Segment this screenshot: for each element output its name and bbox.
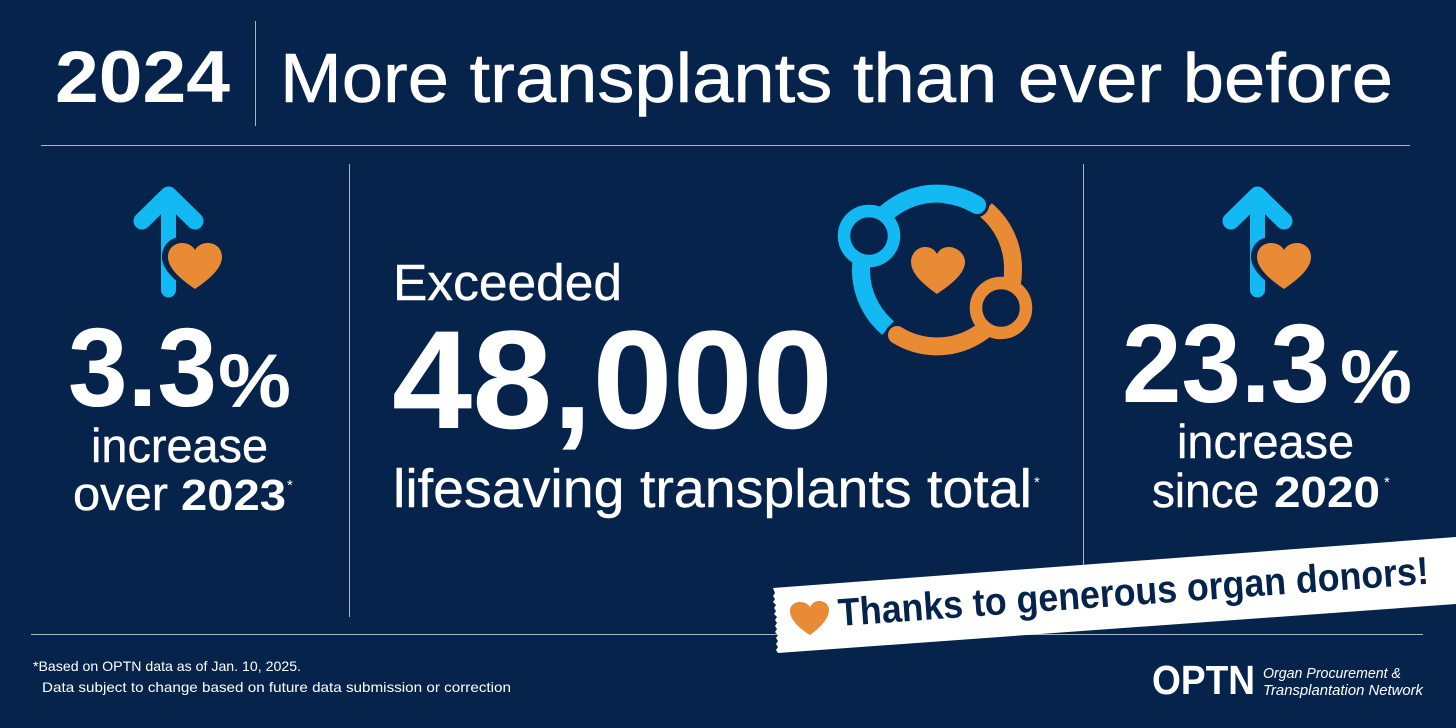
banner: thanks to donors (773, 537, 1456, 653)
caption (1152, 415, 1390, 517)
asterisk: * (1034, 474, 1040, 491)
caption: increase (91, 419, 268, 472)
caption: since (1152, 464, 1259, 517)
caption (73, 419, 293, 520)
footnote: Data subject to change based on future data submission or correction (42, 679, 511, 695)
icon: circular donor ring with heart (844, 193, 1026, 347)
caption: lifesaving transplants total (393, 459, 1032, 519)
logo: OPTN (1152, 657, 1424, 703)
caption: over (73, 467, 168, 520)
caption: 2020 (1274, 468, 1380, 517)
statistic: % (1340, 335, 1412, 420)
title: More transplants than ever before (280, 39, 1393, 117)
caption: * (287, 477, 293, 494)
caption: * (1384, 474, 1390, 491)
title: 2024 (55, 37, 230, 118)
logo: OPTN: Transplantation Network (1263, 682, 1424, 699)
logo: OPTN: OPTN (1152, 657, 1255, 703)
statistic: % (218, 339, 291, 424)
statistic (68, 306, 291, 430)
heading: Exceeded: Exceeded (393, 254, 622, 311)
caption: 2023 (181, 471, 286, 520)
footnote: *Based on OPTN data as of Jan. 10, 2025. (33, 658, 301, 674)
ribbon (773, 537, 1456, 653)
statistic: 23.3 (1122, 302, 1330, 426)
statistic: 3.3 (68, 306, 217, 430)
caption: increase (1177, 415, 1354, 468)
panel: 23.3% increase since 2020 (1122, 195, 1412, 517)
icon: up arrow with heart (1231, 195, 1317, 294)
statistic: 48,000: 48,000 (392, 301, 833, 458)
logo: OPTN: Organ Procurement & (1263, 665, 1401, 682)
panel: 3.3% increase over 2023 (68, 195, 293, 520)
icon: up arrow with heart (142, 195, 228, 294)
footnote (33, 658, 511, 695)
icon: heart (790, 601, 829, 635)
panel: 48,000 total transplants (392, 193, 1040, 519)
